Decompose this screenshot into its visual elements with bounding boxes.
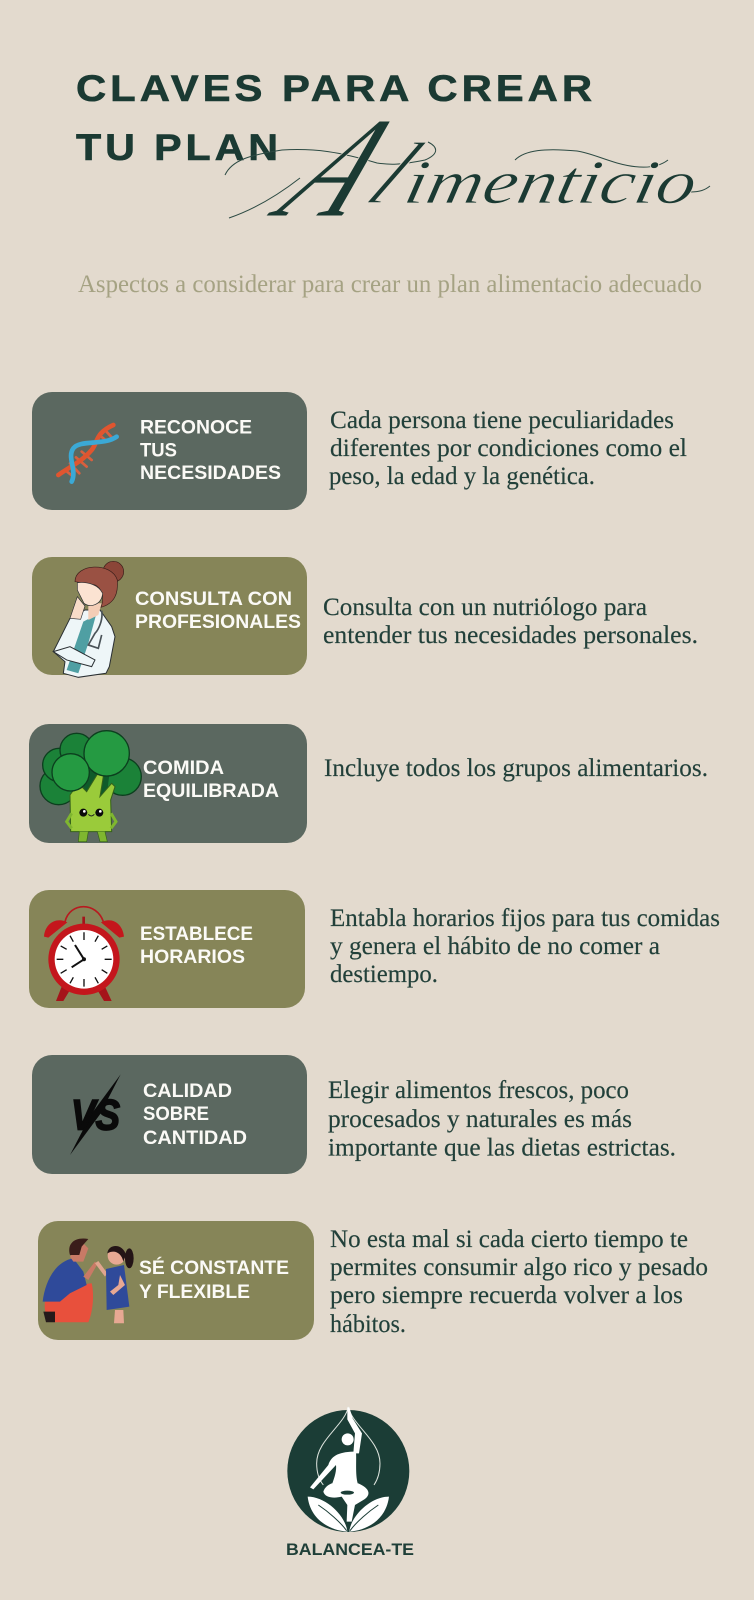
label: NECESIDADES <box>140 462 281 484</box>
text block: calidad: Elegir alimentos frescos, poco <box>328 1075 629 1104</box>
panel: comida equilibrada <box>29 724 307 843</box>
subtitle: Aspectos a considerar para crear un plan alimentacio adecuado <box>78 271 702 298</box>
label: RECONOCE <box>140 416 252 438</box>
logo: balancea-te <box>286 1407 414 1559</box>
label: CALIDAD <box>143 1080 232 1102</box>
text block: reconoce: peso, la edad y la genética. <box>329 461 595 490</box>
label: HORARIOS <box>140 946 245 968</box>
script word: Alimenticio: A <box>242 89 435 248</box>
title line 1: CLAVES PARA CREAR <box>76 68 596 109</box>
text block: comida: Incluye todos los grupos alimentarios. <box>324 753 708 782</box>
text block: reconoce: diferentes por condiciones como el <box>330 433 687 462</box>
icon: broccoli <box>40 731 141 842</box>
icon: dna helix <box>58 425 117 482</box>
panel: se constante y flexible <box>38 1221 314 1340</box>
text block: reconoce <box>329 405 687 490</box>
label: COMIDA <box>143 757 224 779</box>
label: PROFESIONALES <box>135 611 301 633</box>
label <box>135 588 301 633</box>
icon: parent and child <box>43 1239 134 1323</box>
label: TUS <box>140 440 177 462</box>
text block: constante: No esta mal si cada cierto tiempo te <box>330 1224 688 1253</box>
icon: alarm clock <box>44 907 124 1001</box>
text block: horarios <box>330 903 720 988</box>
panel: reconoce tus necesidades <box>32 392 307 510</box>
label <box>143 757 279 802</box>
text block: constante: permites consumir algo rico y pesado <box>330 1252 708 1281</box>
text block: calidad: importante que las dietas estrictas. <box>328 1132 676 1162</box>
label: CONSULTA CON <box>135 588 292 610</box>
panel: consulta con profesionales <box>32 557 307 677</box>
icon: versus: VS <box>71 1092 120 1140</box>
icon: doctor <box>53 561 124 677</box>
label <box>143 1080 247 1149</box>
label: ESTABLECE <box>140 923 253 945</box>
logo wordmark: BALANCEA-TE <box>286 1541 414 1559</box>
panel: establece horarios <box>29 890 305 1008</box>
text block: consulta: entender tus necesidades personales. <box>323 620 698 649</box>
script word: Alimenticio <box>225 89 710 248</box>
text block: calidad <box>328 1075 676 1162</box>
text block: calidad: procesados y naturales es más <box>328 1104 632 1133</box>
label: Y FLEXIBLE <box>139 1281 250 1303</box>
label: SOBRE <box>143 1103 209 1125</box>
text block: consulta <box>323 592 698 649</box>
text block: horarios: y genera el hábito de no comer a <box>330 931 660 960</box>
script word: Alimenticio: l <box>348 126 440 223</box>
label: EQUILIBRADA <box>143 780 279 802</box>
text block: horarios: destiempo. <box>330 959 438 988</box>
logo mark <box>287 1407 409 1532</box>
label: SÉ CONSTANTE <box>139 1256 289 1279</box>
title line 2: TU PLAN <box>76 127 282 168</box>
text block: horarios: Entabla horarios fijos para tus comidas <box>330 903 720 932</box>
text block: constante <box>330 1224 708 1338</box>
text block: reconoce: Cada persona tiene peculiaridades <box>330 405 674 434</box>
label <box>140 923 253 968</box>
label <box>140 416 281 484</box>
text block: consulta: Consulta con un nutriólogo para <box>323 592 647 621</box>
label: CANTIDAD <box>143 1127 247 1149</box>
icon: versus <box>70 1074 121 1155</box>
panel: calidad sobre cantidad <box>32 1055 307 1174</box>
label <box>139 1256 289 1303</box>
text block: constante: pero siempre recuerda volver a los <box>330 1280 683 1309</box>
script word: Alimenticio: imenticio <box>399 148 704 217</box>
title <box>76 68 710 248</box>
text block: constante: hábitos. <box>330 1309 406 1338</box>
